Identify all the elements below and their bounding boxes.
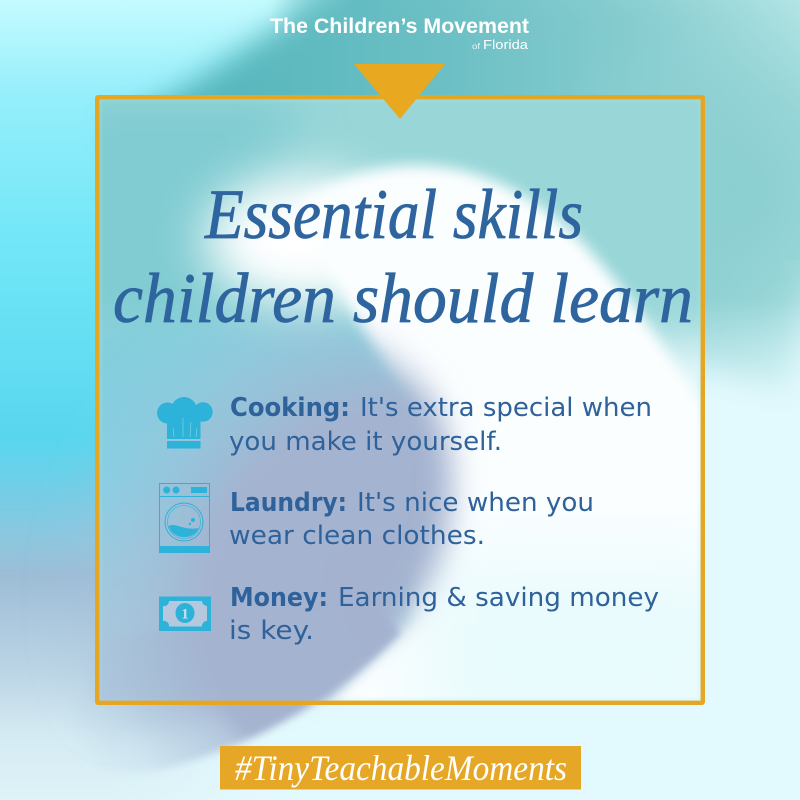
icon: washing machine [159,484,210,553]
logo: The Children’s Movement [270,15,529,38]
title [113,176,693,338]
skill: cooking: It's extra special when [360,393,652,423]
skill: laundry: It's nice when you [357,488,594,518]
skill: money: Money: [230,583,328,613]
gold triangle [354,64,445,119]
logo: Florida [483,37,529,52]
title: children should learn [113,260,693,338]
skill: cooking: Cooking: [230,393,350,423]
hashtag banner: #TinyTeachableMoments [235,748,567,788]
skill: laundry: Laundry: [230,488,347,518]
frame interior panel [99,99,700,700]
skill: laundry [230,488,594,518]
purple swirl [92,326,470,770]
title: Essential skills [204,176,583,254]
skill: laundry line 2: wear clean clothes. [229,521,485,551]
skills text [229,393,659,646]
icon: chef hat [157,397,213,448]
logo [270,15,529,52]
icon: money bill: 1 [181,606,189,622]
icon: money bill [159,596,211,631]
gold frame [97,97,703,703]
skill: cooking [230,393,652,423]
skill: money: Earning & saving money [338,583,659,613]
skill: money line 2: is key. [229,616,314,646]
skill: cooking line 2: you make it yourself. [229,427,502,457]
logo: of [472,42,481,51]
